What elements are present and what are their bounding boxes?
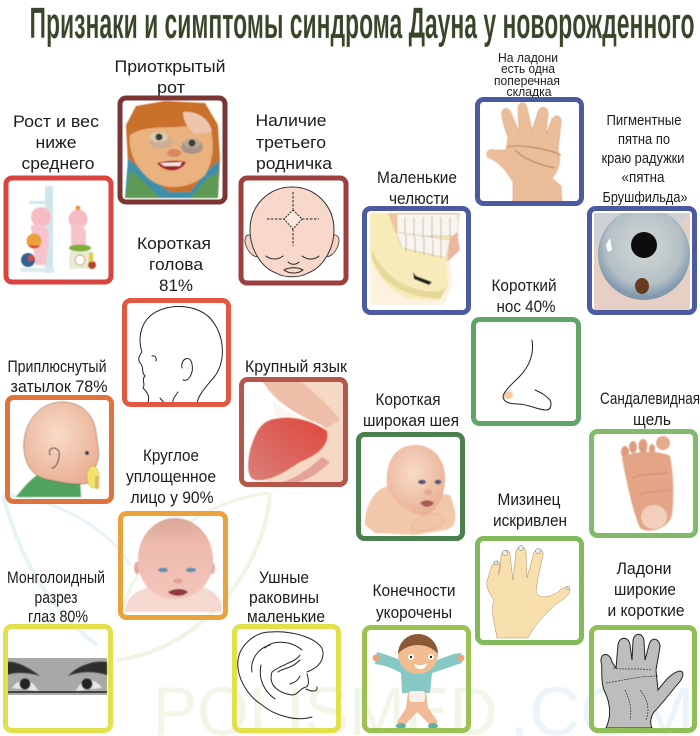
panel: wide short palms: [592, 559, 694, 730]
frame: [124, 300, 228, 404]
label: small jaw: Маленькие: [377, 168, 457, 187]
illustration: baby lying: [365, 445, 455, 535]
illustration: nose outline: [503, 340, 551, 410]
label: round flat face: [126, 446, 216, 507]
panel: curved little finger: [478, 490, 582, 642]
illustration: child face painting: [125, 101, 220, 198]
illustration: foot sole: [621, 436, 673, 531]
label: mongoloid eyes: разрез: [34, 588, 78, 607]
label: open mouth: Приоткрытый: [114, 57, 226, 76]
frame: [234, 626, 338, 730]
label: large tongue: Крупный язык: [245, 357, 348, 376]
label: short head: 81%: [159, 276, 193, 295]
frame: [6, 178, 111, 282]
label: short nose: нос 40%: [496, 297, 556, 316]
label: single palm crease: [494, 51, 560, 99]
panel: single palm crease: [478, 51, 582, 204]
label: single palm crease: поперечная: [494, 74, 560, 88]
frame: [590, 208, 694, 312]
label: single palm crease: есть одна: [501, 62, 555, 76]
frame: [6, 626, 110, 730]
illustration: gray hand print: [601, 634, 683, 728]
label: open mouth: рот: [157, 78, 185, 97]
illustration: baby head with fontanelle: [245, 187, 339, 277]
label: Brushfield spots: [602, 112, 688, 206]
frame: [478, 100, 582, 204]
label: third fontanelle: Наличие: [256, 111, 326, 130]
illustration: mouth with tongue: [248, 380, 345, 484]
label: small jaw: челюсти: [389, 189, 449, 208]
label: shortened limbs: Конечности: [372, 581, 456, 600]
label: short nose: [492, 276, 556, 316]
label: short head: Короткая: [137, 234, 211, 253]
frame: [120, 514, 226, 618]
label: shortened limbs: укорочены: [376, 603, 452, 622]
label: single palm crease: На ладони: [498, 51, 558, 65]
panel: short wide neck: [358, 390, 462, 538]
label: short wide neck: [363, 390, 459, 430]
label: third fontanelle: [256, 111, 333, 173]
panel: small jaw: [364, 168, 468, 312]
panel: sandal gap: [592, 389, 700, 536]
label: curved little finger: искривлен: [493, 511, 567, 530]
illustration: hand with curved little finger: [487, 546, 570, 638]
label: small ears: [247, 568, 325, 626]
panel: third fontanelle: [241, 111, 346, 283]
label: height and weight: среднего: [22, 154, 94, 173]
watermark: leaf logo and site name: [3, 493, 694, 736]
label: short wide neck: Короткая: [376, 390, 440, 409]
panel: small ears: [234, 568, 338, 730]
frame: [364, 628, 468, 730]
label: Brushfield spots: «пятна: [622, 169, 665, 186]
label: small jaw: [377, 168, 457, 208]
label: wide short palms: широкие: [614, 580, 676, 599]
illustration: baby profile with pacifier: [16, 402, 99, 497]
label: small ears: маленькие: [247, 607, 325, 626]
label: height and weight: ниже: [36, 133, 76, 152]
panel: Brushfield spots: [590, 112, 694, 312]
illustration: cartoon boy: [372, 634, 464, 729]
label: wide short palms: Ладони: [616, 559, 672, 578]
label: wide short palms: и короткие: [608, 601, 684, 620]
panel: short nose: [474, 276, 578, 424]
label: short nose: Короткий: [492, 276, 556, 295]
frame: [592, 628, 694, 730]
illustration: photo strip of eyes: [7, 658, 107, 695]
label: mongoloid eyes: глаз 80%: [28, 607, 88, 626]
illustration: baby hand: [487, 103, 562, 203]
frame: [8, 398, 112, 502]
illustration: baby front face: [125, 518, 222, 612]
panel: large tongue: [242, 357, 348, 484]
frame: [592, 432, 696, 536]
frame: [474, 320, 578, 424]
illustration: babies on ruler and scale: [20, 186, 96, 273]
frame: [120, 98, 225, 202]
panel: short head: [124, 234, 228, 404]
label: height and weight: [13, 112, 100, 173]
panel: round flat face: [120, 446, 226, 618]
panel: mongoloid eyes: [6, 568, 110, 730]
frame: [241, 178, 346, 283]
label: round flat face: Круглое: [143, 446, 199, 465]
illustration: head profile outline: [139, 306, 222, 404]
label: third fontanelle: третьего: [256, 133, 326, 152]
label: flat occiput: Приплюснутый: [8, 357, 106, 376]
label: mongoloid eyes: [7, 568, 105, 626]
label: single palm crease: складка: [506, 85, 552, 99]
label: curved little finger: Мизинец: [498, 490, 561, 509]
panel: flat occiput: [8, 357, 112, 502]
frame: [364, 208, 468, 312]
frame: [358, 434, 462, 538]
label: small ears: Ушные: [259, 568, 309, 587]
label: height and weight: Рост и вес: [13, 112, 100, 131]
panel: height and weight: [6, 112, 111, 282]
label: short head: голова: [149, 255, 204, 274]
label: round flat face: лицо у 90%: [130, 488, 214, 507]
label: wide short palms: [608, 559, 684, 620]
label: Brushfield spots: Брушфильда»: [602, 189, 688, 206]
label: mongoloid eyes: Монголоидный: [7, 568, 105, 587]
label: third fontanelle: родничка: [256, 154, 333, 173]
label: flat occiput: затылок 78%: [10, 377, 108, 396]
label: short head: [137, 234, 211, 295]
label: sandal gap: щель: [633, 410, 671, 429]
label: shortened limbs: [372, 581, 456, 622]
illustration: iris with spot: [594, 208, 690, 310]
label: small ears: раковины: [249, 588, 319, 607]
frame: [478, 538, 582, 642]
panel: open mouth: [114, 57, 226, 202]
label: curved little finger: [493, 490, 567, 530]
panel: shortened limbs: [364, 581, 468, 730]
label: Brushfield spots: краю радужки: [602, 150, 684, 167]
label: round flat face: уплощенное: [126, 467, 216, 486]
label: Brushfield spots: Пигментные: [606, 112, 682, 129]
illustration: ear outline: [238, 632, 323, 719]
label: short wide neck: широкая шея: [363, 411, 459, 430]
label: sandal gap: [600, 389, 700, 429]
label: open mouth: [114, 57, 226, 97]
label: flat occiput: [8, 357, 108, 396]
illustration: jaw with teeth: [370, 213, 460, 305]
frame: [242, 380, 346, 484]
label: Brushfield spots: пятна по: [618, 131, 670, 148]
